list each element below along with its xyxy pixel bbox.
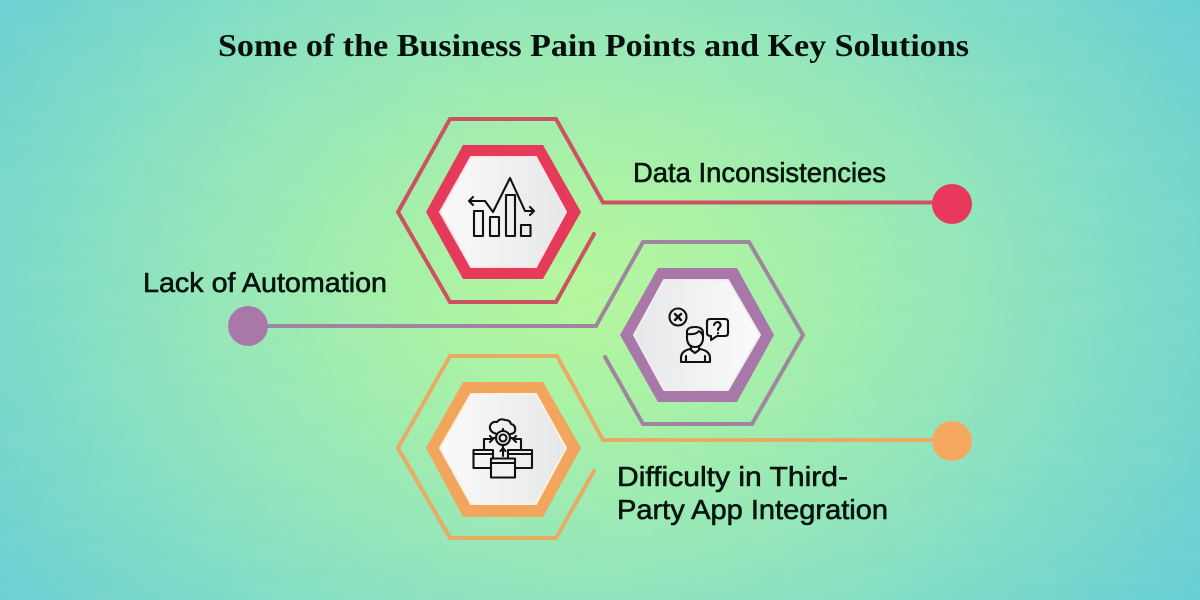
panel: data inconsistencies [398,119,972,302]
outline hexagon and connector: red [398,119,940,302]
inner hexagon: white [440,394,566,504]
panel: third-party integration [398,356,972,538]
hexagon: orange [426,382,581,517]
label: lack of automation: Lack of Automation [143,267,387,298]
outline hexagon and connector: purple [260,242,803,424]
inner hexagon: white [440,157,566,267]
title: Some of the Business Pain Points and Key Solutions [218,27,969,63]
inner hexagon: white [634,280,760,390]
hexagon: red [426,145,581,279]
icon: cloud integration [474,419,532,478]
panel: lack of automation [143,242,803,424]
connector dot: purple [228,306,268,346]
outline hexagon and connector: orange [398,356,940,538]
connector dot: orange [932,421,972,461]
label: difficulty in third-party app integration: Party App Integration [617,494,888,525]
label: data inconsistencies: Data Inconsistencies [633,157,886,188]
connector dot: red [932,184,972,224]
hexagon: purple [620,268,774,402]
icon: confused person [670,308,728,362]
icon: bar chart with trend line [469,178,534,236]
label: difficulty in third-party app integration: Difficulty in Third- [617,461,848,492]
